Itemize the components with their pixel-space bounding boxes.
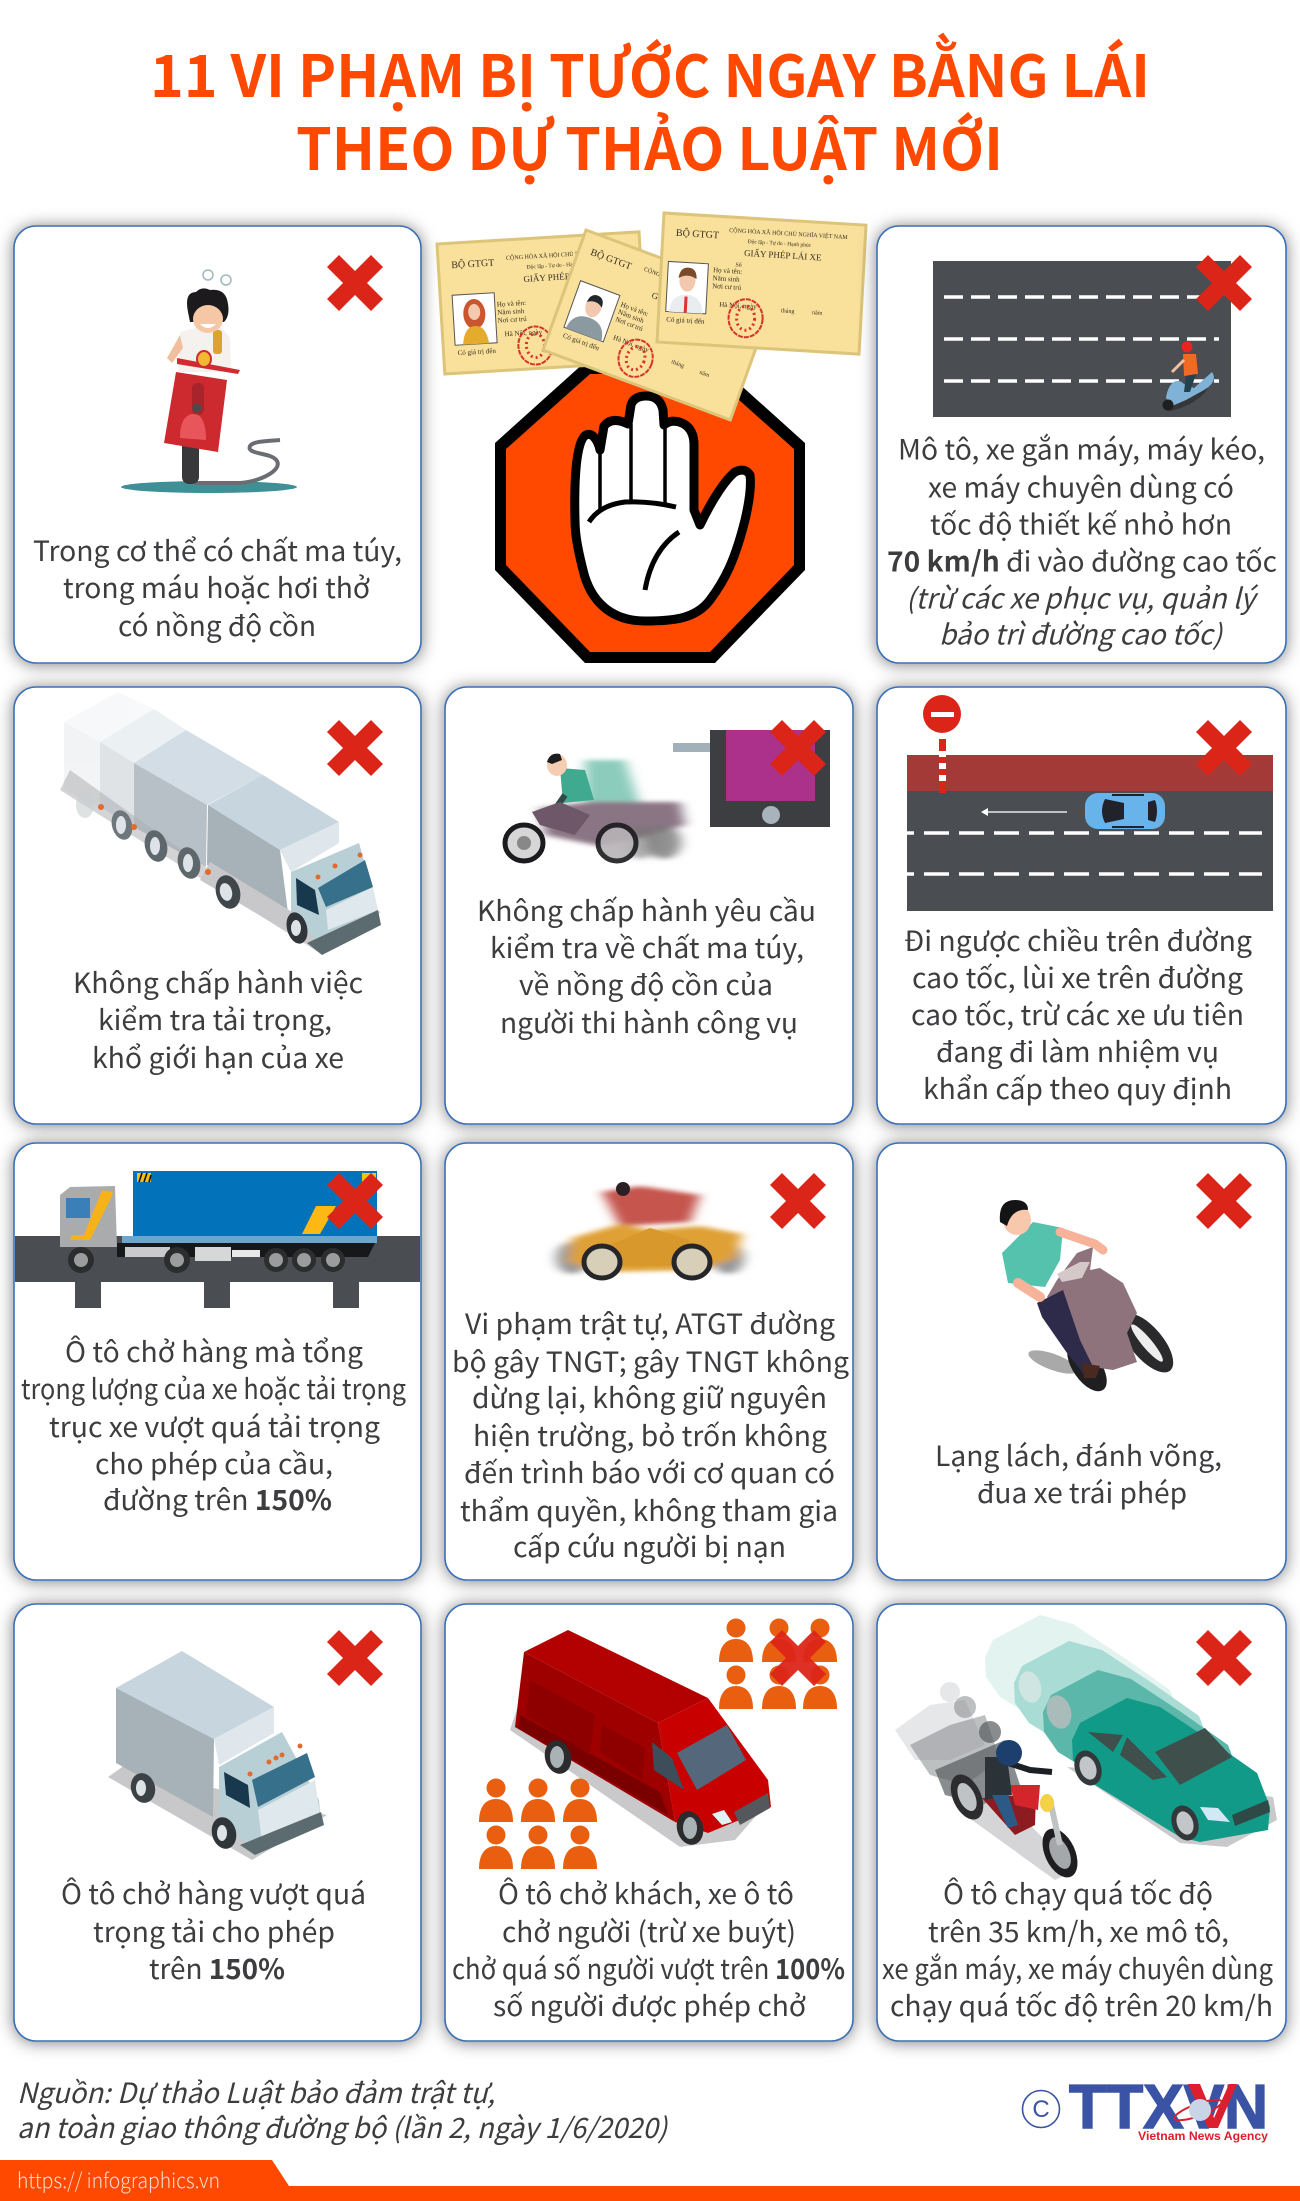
icon: red cross — [1196, 1173, 1252, 1229]
text — [61, 1873, 366, 1988]
icon: drunk scooter rider — [121, 270, 297, 493]
icon: speeding car with ghost trails — [985, 1615, 1277, 1847]
icon: scooter rider — [1162, 342, 1214, 415]
text: cao tốc, lùi xe trên đường — [912, 957, 1243, 997]
panel: refusing alcohol test — [445, 687, 853, 1124]
text: dừng lại, không giữ nguyên — [472, 1377, 827, 1417]
text: Trong cơ thể có chất ma túy, — [33, 530, 402, 570]
text: đường trên 150% — [103, 1479, 332, 1519]
text — [882, 1873, 1273, 2025]
footer bar — [0, 2160, 1300, 2201]
licence card left: Độc lập - Tự do - Hạnh phúc — [527, 261, 591, 271]
text — [477, 890, 816, 1042]
licence card right: Năm sinh — [712, 274, 740, 284]
text: đến trình báo với cơ quan có — [464, 1452, 835, 1492]
text: về nồng độ cồn của — [519, 964, 773, 1004]
icon: red cross — [327, 1630, 383, 1686]
licence card right: Độc lập - Tự do - Hạnh phúc — [748, 239, 812, 249]
icon: red cross — [770, 720, 826, 776]
text: Ô tô chở hàng mà tổng — [65, 1331, 363, 1371]
licence card right: Nơi cư trú — [712, 282, 742, 292]
panel: refusing load inspection — [14, 687, 421, 1124]
text: chạy quá tốc độ trên 20 km/h — [890, 1985, 1273, 2025]
text: cao tốc, trừ các xe ưu tiên — [911, 994, 1244, 1034]
licence card right: GIẤY PHÉP LÁI XE — [744, 248, 822, 263]
licence card right — [657, 213, 866, 354]
text: Ô tô chở hàng vượt quá — [61, 1873, 366, 1913]
road illustration — [933, 261, 1231, 417]
icon: container truck — [60, 1171, 377, 1273]
icon: speeding motorbike — [505, 754, 685, 861]
licence card middle: Độc lập - Tự do - Hạnh phúc — [658, 283, 720, 311]
icon: red cross — [1196, 255, 1252, 311]
text: khẩn cấp theo quy định — [923, 1068, 1232, 1108]
text: (trừ các xe phục vụ, quản lý — [906, 578, 1259, 618]
text: trục xe vượt quá tải trọng — [49, 1406, 380, 1446]
icon: speeding motorbike — [895, 1682, 1085, 1883]
licence card left: Hà Nội, ngày — [504, 328, 543, 338]
text — [452, 1873, 845, 2025]
text — [33, 530, 402, 645]
text: kiểm tra tải trọng, — [98, 999, 332, 1039]
licence card left: CỘNG HÒA XÃ HỘI CHỦ NGHĨA VIỆT NAM — [506, 247, 625, 262]
licence card right: năm — [812, 310, 823, 317]
panel: overloaded cargo — [14, 1604, 421, 2041]
licence card left: Họ và tên: — [497, 299, 526, 309]
logo: TTXVN: Vietnam News Agency — [1138, 2129, 1268, 2143]
text: Ô tô chạy quá tốc độ — [943, 1873, 1213, 1913]
text: chở quá số người vượt trên 100% — [452, 1948, 845, 1988]
title — [150, 30, 1150, 187]
icon: passengers group bottom — [479, 1778, 597, 1869]
text: cấp cứu người bị nạn — [513, 1526, 786, 1566]
licence card right: CỘNG HÒA XÃ HỘI CHỦ NGHĨA VIỆT NAM — [729, 226, 849, 241]
text: trên 35 km/h, xe mô tô, — [928, 1911, 1229, 1951]
licence card left — [437, 232, 647, 374]
icon: blurred yellow motorbike — [556, 1182, 744, 1278]
licence card left: GIẤY PHÉP LÁI XE — [523, 269, 602, 284]
text: 70 km/h đi vào đường cao tốc — [887, 540, 1277, 580]
road illustration — [907, 695, 1273, 911]
text: cho phép của cầu, — [95, 1443, 333, 1483]
text: trọng lượng của xe hoặc tải trọng — [21, 1368, 406, 1408]
icon: red cross — [327, 255, 383, 311]
text: đang đi làm nhiệm vụ — [936, 1031, 1219, 1071]
logo: TTXVN: TTXVN — [1069, 2073, 1268, 2142]
text: xe máy chuyên dùng có — [928, 466, 1234, 506]
licence card left: Năm sinh — [497, 307, 525, 317]
text — [887, 428, 1277, 654]
text: người thi hành công vụ — [500, 1002, 798, 1042]
icon: stop hand sign — [495, 362, 805, 663]
icon: red cross — [327, 720, 383, 776]
icon: passengers group top — [719, 1618, 837, 1709]
licence card right: Có giá trị đến — [666, 315, 705, 326]
icon: red cross — [1196, 1630, 1252, 1686]
licence card left: Có giá trị đến — [457, 347, 497, 357]
licence card right: Họ và tên: — [713, 266, 742, 276]
text — [73, 962, 363, 1077]
logo: TTXVN: C — [1032, 2096, 1050, 2123]
licence card middle: Năm sinh — [617, 308, 645, 325]
text: Mô tô, xe gắn máy, máy kéo, — [898, 428, 1265, 468]
licence card middle: năm — [698, 370, 710, 379]
text: Không chấp hành yêu cầu — [477, 890, 816, 930]
text: bộ gây TNGT; gây TNGT không — [452, 1341, 849, 1381]
licence card right: tháng — [781, 308, 795, 315]
text: Vi phạm trật tự, ATGT đường — [465, 1303, 835, 1343]
text — [904, 920, 1252, 1108]
licence card left: BỘ GTGT — [451, 257, 495, 271]
licence card right: Số — [735, 261, 742, 269]
text: bảo trì đường cao tốc) — [939, 614, 1224, 654]
licence card middle: GIẤY PHÉP LÁI XE — [650, 290, 727, 327]
text: Ô tô chở khách, xe ô tô — [498, 1873, 794, 1913]
icon: red cross — [770, 1630, 826, 1686]
text: trong máu hoặc hơi thở — [63, 567, 370, 607]
panel: weaving and racing — [877, 1143, 1286, 1580]
bridge illustration — [15, 1171, 420, 1308]
licence card right: BỘ GTGT — [676, 227, 719, 241]
panel: speeding — [877, 1604, 1286, 2041]
text: hiện trường, bỏ trốn không — [473, 1415, 827, 1455]
licence card middle: tháng — [670, 359, 685, 370]
text: khổ giới hạn của xe — [92, 1037, 344, 1077]
text: tốc độ thiết kế nhỏ hơn — [930, 504, 1232, 544]
source note — [17, 2072, 669, 2147]
panel: overloaded passengers — [445, 1604, 853, 2041]
icon: tablet — [673, 730, 830, 827]
source note: an toàn giao thông đường bộ (lần 2, ngày 1/6/2020) — [17, 2107, 669, 2147]
text: có nồng độ cồn — [118, 605, 316, 645]
text: chở người (trừ xe buýt) — [502, 1911, 796, 1951]
title: 11 VI PHẠM BỊ TƯỚC NGAY BẰNG LÁI — [150, 30, 1150, 114]
licence card middle: Hà Nội, ngày — [612, 334, 650, 354]
icon: blue car — [1085, 793, 1165, 829]
licence card middle: Có giá trị đến — [562, 332, 601, 353]
licence card left: Nơi cư trú — [498, 315, 527, 325]
text: kiểm tra về chất ma túy, — [490, 927, 804, 967]
text: trọng tải cho phép — [93, 1911, 335, 1951]
icon: leaning motorbike rider — [1000, 1200, 1182, 1398]
panel: wrong way on expressway — [877, 687, 1286, 1124]
text: Không chấp hành việc — [73, 962, 363, 1002]
panel: slow vehicles on expressway — [877, 226, 1286, 663]
licence card middle — [543, 230, 773, 420]
icon: no entry sign — [923, 695, 961, 793]
text: Đi ngược chiều trên đường — [904, 920, 1252, 960]
licence card right: Hà Nội, ngày — [719, 301, 757, 311]
panel: overweight on bridges — [14, 1143, 421, 1580]
text — [935, 1435, 1222, 1512]
text: xe gắn máy, xe máy chuyên dùng — [882, 1948, 1273, 1988]
text — [452, 1303, 849, 1566]
licence card middle: Nơi cư trú — [614, 315, 644, 333]
text: đua xe trái phép — [977, 1472, 1187, 1512]
footer bar: https:// infographics.vn — [17, 2165, 220, 2195]
title: THEO DỰ THẢO LUẬT MỚI — [296, 103, 1003, 187]
text: trên 150% — [149, 1948, 285, 1988]
panel: hit and run — [445, 1143, 853, 1580]
text: Lạng lách, đánh võng, — [935, 1435, 1222, 1475]
panel: drugs and alcohol — [14, 226, 421, 663]
text — [21, 1331, 406, 1519]
arrow — [981, 808, 1067, 816]
central stop sign with driving licences — [437, 213, 866, 663]
source note: Nguồn: Dự thảo Luật bảo đảm trật tự, — [17, 2072, 495, 2112]
licence card middle: CỘNG HÒA XÃ HỘI CHỦ NGHĨA VIỆT NAM — [643, 265, 757, 314]
text: thẩm quyền, không tham gia — [460, 1490, 838, 1530]
icon: red cross — [770, 1173, 826, 1229]
icon: box truck — [108, 1651, 327, 1860]
icon: red cross — [1196, 720, 1252, 776]
licence card middle: Họ và tên: — [620, 300, 650, 318]
licence card middle: BỘ GTGT — [589, 246, 633, 273]
icon: long truck with ghost trails — [60, 692, 381, 955]
text: số người được phép chở — [493, 1985, 806, 2025]
icon: red van — [510, 1630, 771, 1848]
icon: red cross — [327, 1173, 383, 1229]
